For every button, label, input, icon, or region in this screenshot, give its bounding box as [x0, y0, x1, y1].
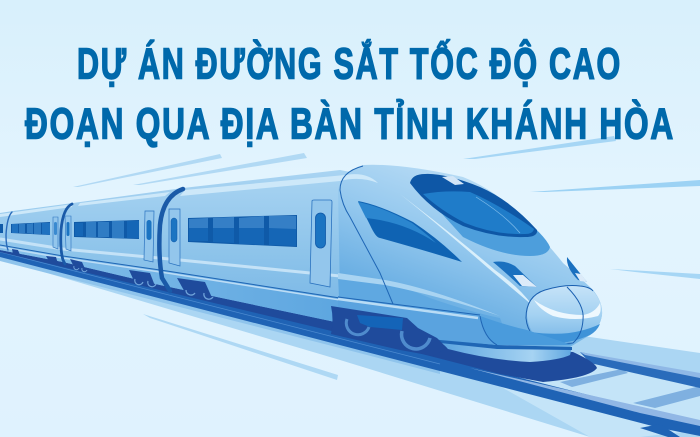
headlight left: [493, 262, 537, 287]
windows car 3: [11, 222, 50, 235]
windshield: [410, 174, 537, 237]
lower body sweep: [338, 276, 510, 345]
speed lines: [73, 136, 700, 380]
lower skirt: [438, 316, 572, 362]
track shadow band: [0, 252, 700, 437]
cone outline: [526, 286, 593, 344]
near rail: [0, 247, 700, 437]
nose body: [338, 165, 602, 347]
windows car 4: [0, 224, 3, 233]
far rail: [580, 352, 700, 388]
body lower band: [338, 296, 497, 345]
side window: [358, 201, 462, 262]
sweep highlight: [338, 273, 500, 316]
carriage lower band: [0, 245, 340, 323]
cone highlight: [534, 300, 601, 319]
windows car 2: [74, 220, 139, 239]
roof highlight on nose: [340, 174, 378, 183]
windows car 1: [188, 215, 297, 247]
front lower panel: [480, 316, 572, 345]
wheel: [346, 319, 369, 335]
headlight right: [567, 257, 587, 282]
doors: [53, 200, 332, 287]
windshield surround: [425, 195, 550, 256]
front bogie: [331, 306, 447, 356]
cone lower band: [530, 324, 600, 343]
roof highlights: [0, 175, 345, 217]
diagonal highlight: [400, 194, 532, 305]
title: [25, 38, 675, 148]
body stripes: [0, 239, 340, 300]
carriages body: [0, 170, 440, 345]
sleepers: [560, 369, 700, 408]
shadow under train: [0, 246, 597, 382]
rear bogies: [12, 249, 213, 300]
carriage connectors: [6, 189, 183, 291]
door seam: [340, 166, 393, 304]
train: [0, 165, 602, 362]
railway track: [0, 247, 700, 437]
wheel rear: [402, 331, 430, 349]
nose cone: [526, 286, 602, 344]
